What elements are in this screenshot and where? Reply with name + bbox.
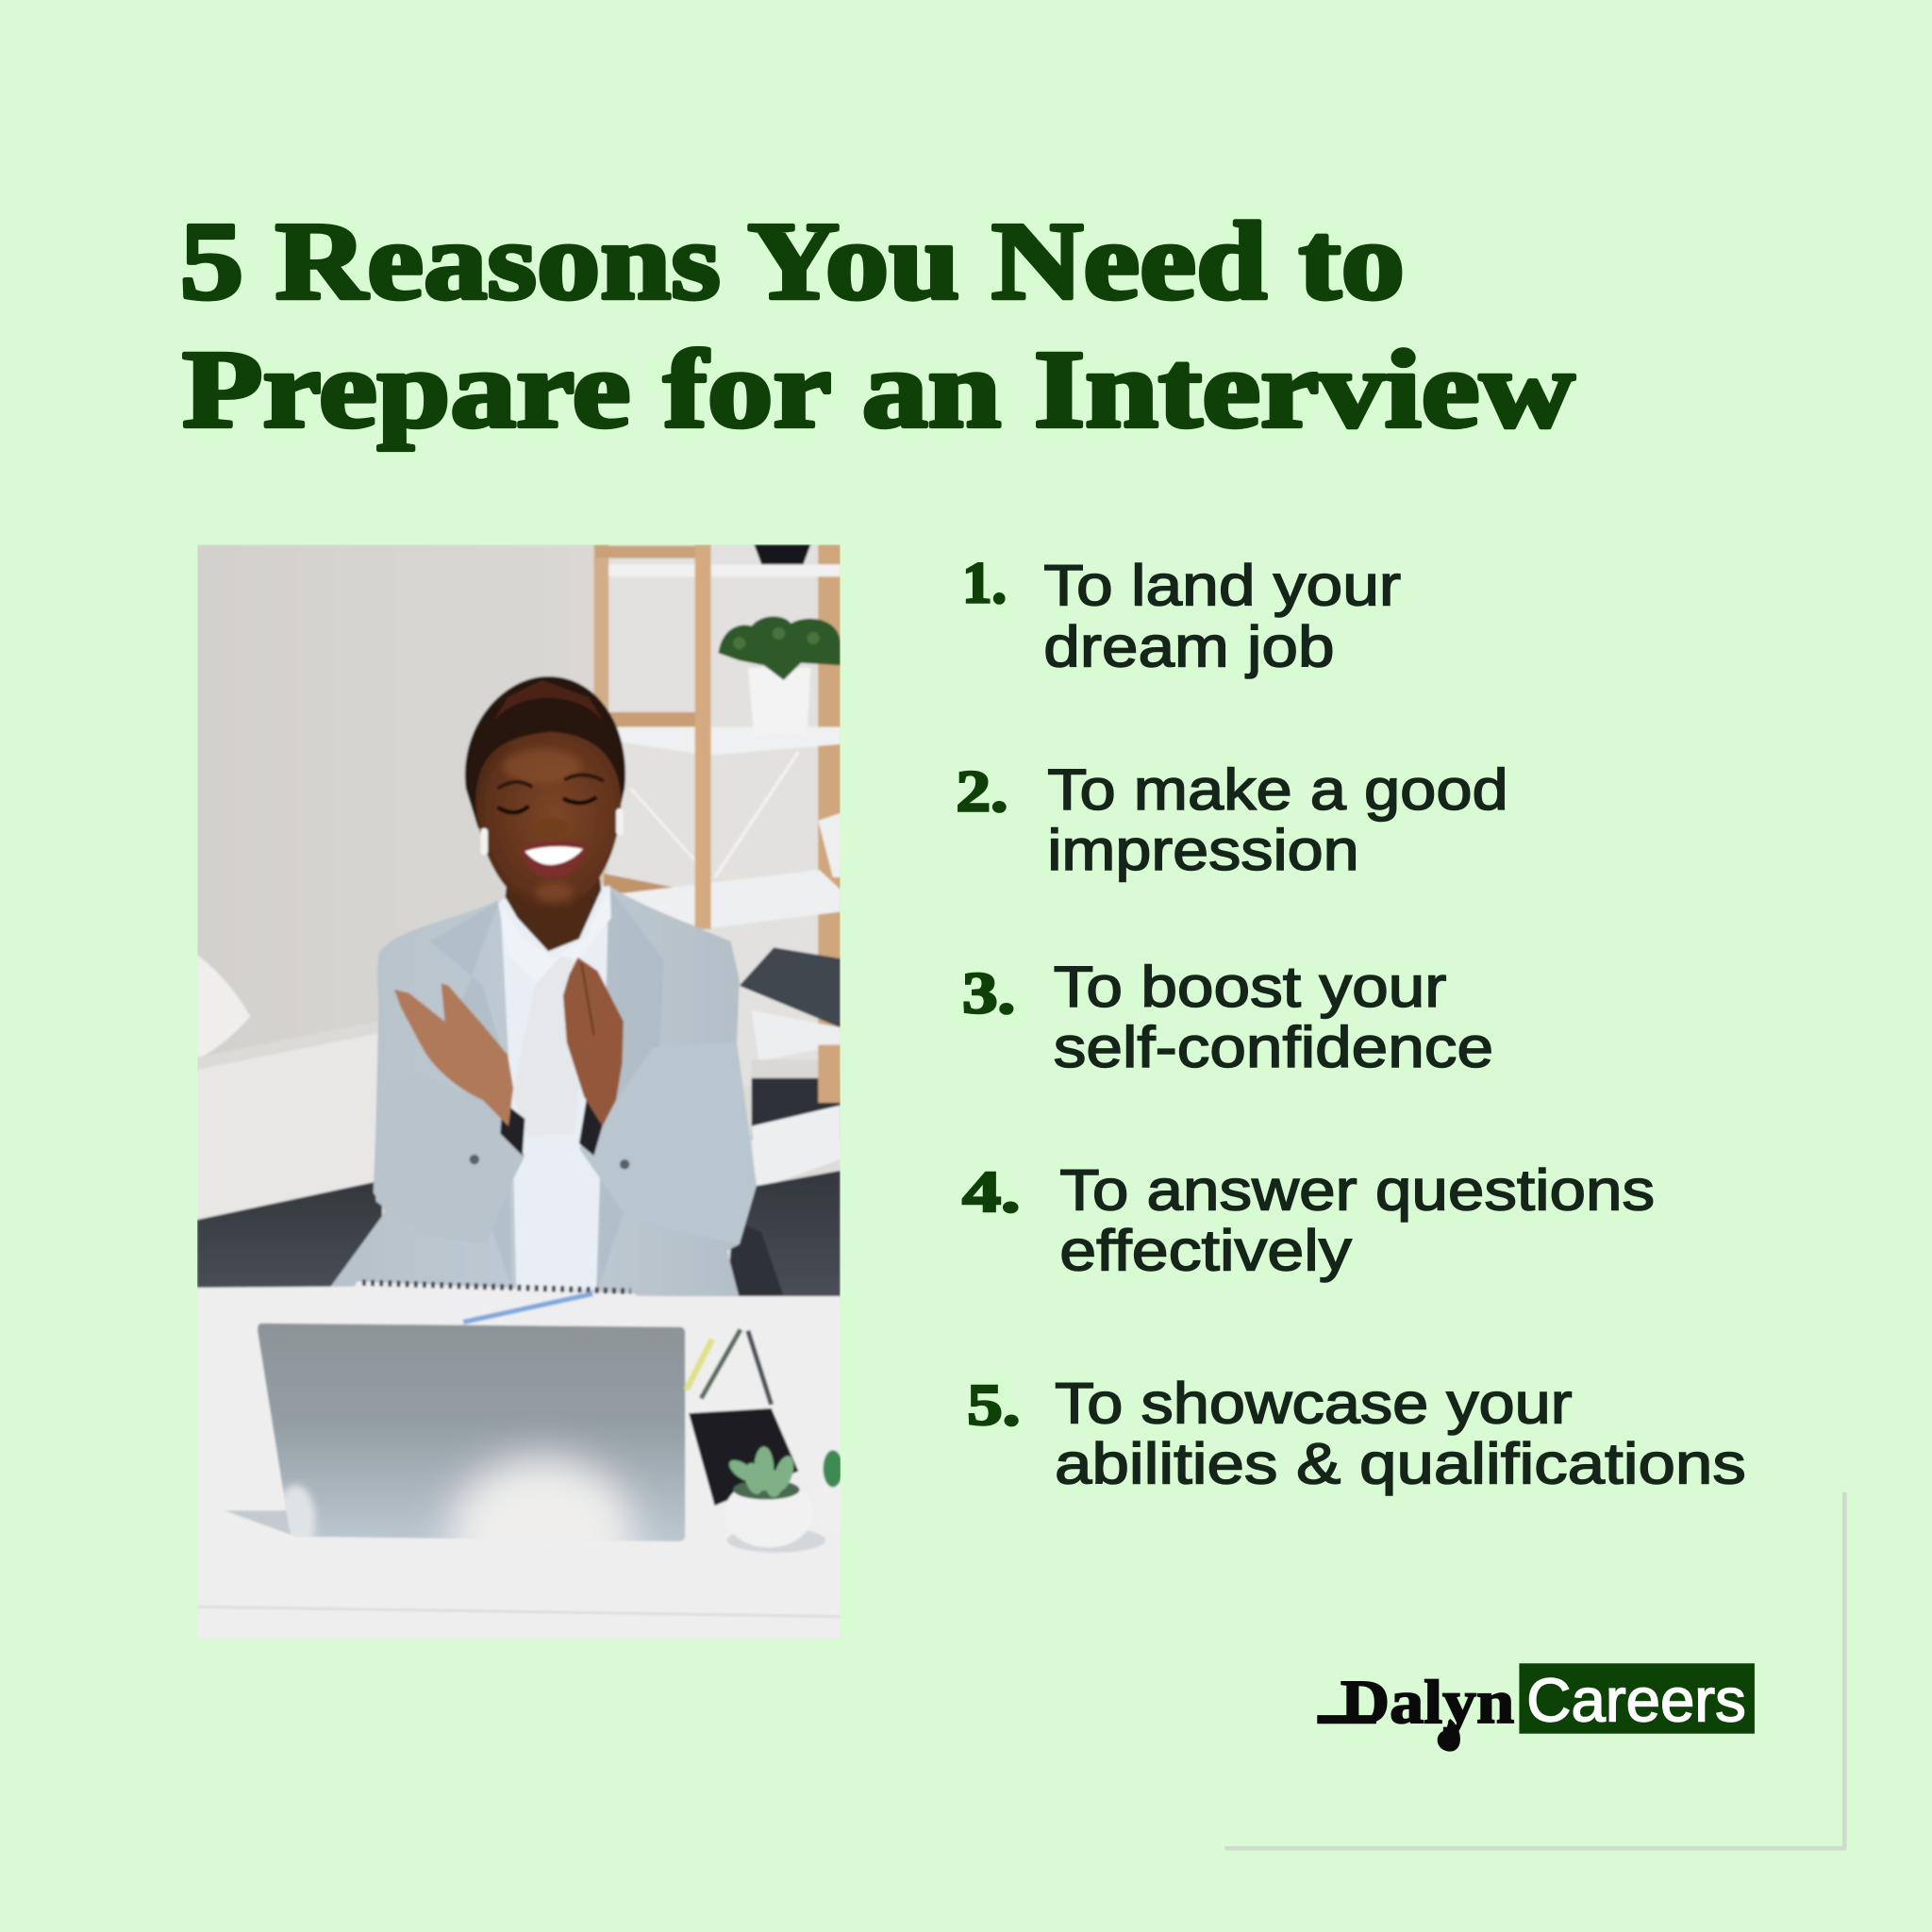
list item 5 [967,1372,1746,1497]
black pot [754,544,810,564]
succulent pots [724,1446,849,1553]
wall [197,544,841,1296]
list item 3 [962,955,1493,1080]
desk [197,1287,841,1639]
white cabinet [197,1033,382,1220]
list item 4 [962,1158,1655,1284]
green plant [718,616,841,680]
bookshelf [594,544,841,1191]
chair [727,1220,784,1296]
list item 4: To answer questions [1059,1158,1655,1224]
list item 1: dream job [1043,615,1335,680]
jacket buttons [470,1155,479,1164]
left hand [394,983,513,1126]
logo: Dalyn Careers [1317,1663,1755,1750]
list item 2 [957,758,1508,883]
list item 2: impression [1047,818,1359,883]
pens [687,1329,772,1405]
corner frame line [1224,1492,1844,1848]
tie [512,957,591,1136]
title [180,200,1574,451]
logo: Dalyn Careers: Dalyn [1341,1669,1514,1737]
neck [506,850,601,951]
list item 5: 5. [967,1372,1020,1438]
photo: smiling woman clapping at desk with laptop [197,544,849,1639]
title: Prepare for an Interview [182,328,1574,451]
list item 4: 4. [962,1158,1020,1224]
brows and eyes [498,782,532,789]
list item 3: self-confidence [1054,1015,1493,1080]
jacket [329,886,757,1297]
list item 2: To make a good [1047,758,1508,823]
white planter [748,668,811,727]
sleeve cuffs [500,1102,525,1156]
smile [520,841,588,878]
floor [197,1180,382,1293]
list item 5: abilities & qualifications [1055,1432,1746,1497]
white blouse [500,886,608,1291]
logo: Dalyn Careers: Careers [1526,1666,1746,1735]
list item 1: To land your [1043,553,1401,618]
notebook [331,1281,636,1331]
title: 5 Reasons You Need to [180,200,1405,323]
laptop shadow [225,1510,295,1537]
sleeve left forearm [375,1072,525,1244]
hair [465,676,625,828]
laptop [258,1324,685,1610]
dark cushion [740,947,841,1027]
white lamp [197,955,250,1059]
list item 4: effectively [1059,1219,1352,1284]
right lapel shade [579,886,664,1288]
phone [689,1408,798,1506]
list item 5: To showcase your [1055,1372,1573,1437]
right hand [563,958,624,1126]
list item 1: 1. [962,550,1007,616]
face [475,732,621,912]
nose [532,818,569,838]
sleeve right forearm [579,1042,757,1244]
head [465,676,625,912]
left lapel shade [430,899,511,1288]
list item 1 [962,550,1401,680]
list item 2: 2. [957,758,1008,824]
collar [498,885,611,986]
earbuds [480,828,488,855]
list item 3: 3. [962,960,1015,1026]
list item 3: To boost your [1054,955,1446,1020]
